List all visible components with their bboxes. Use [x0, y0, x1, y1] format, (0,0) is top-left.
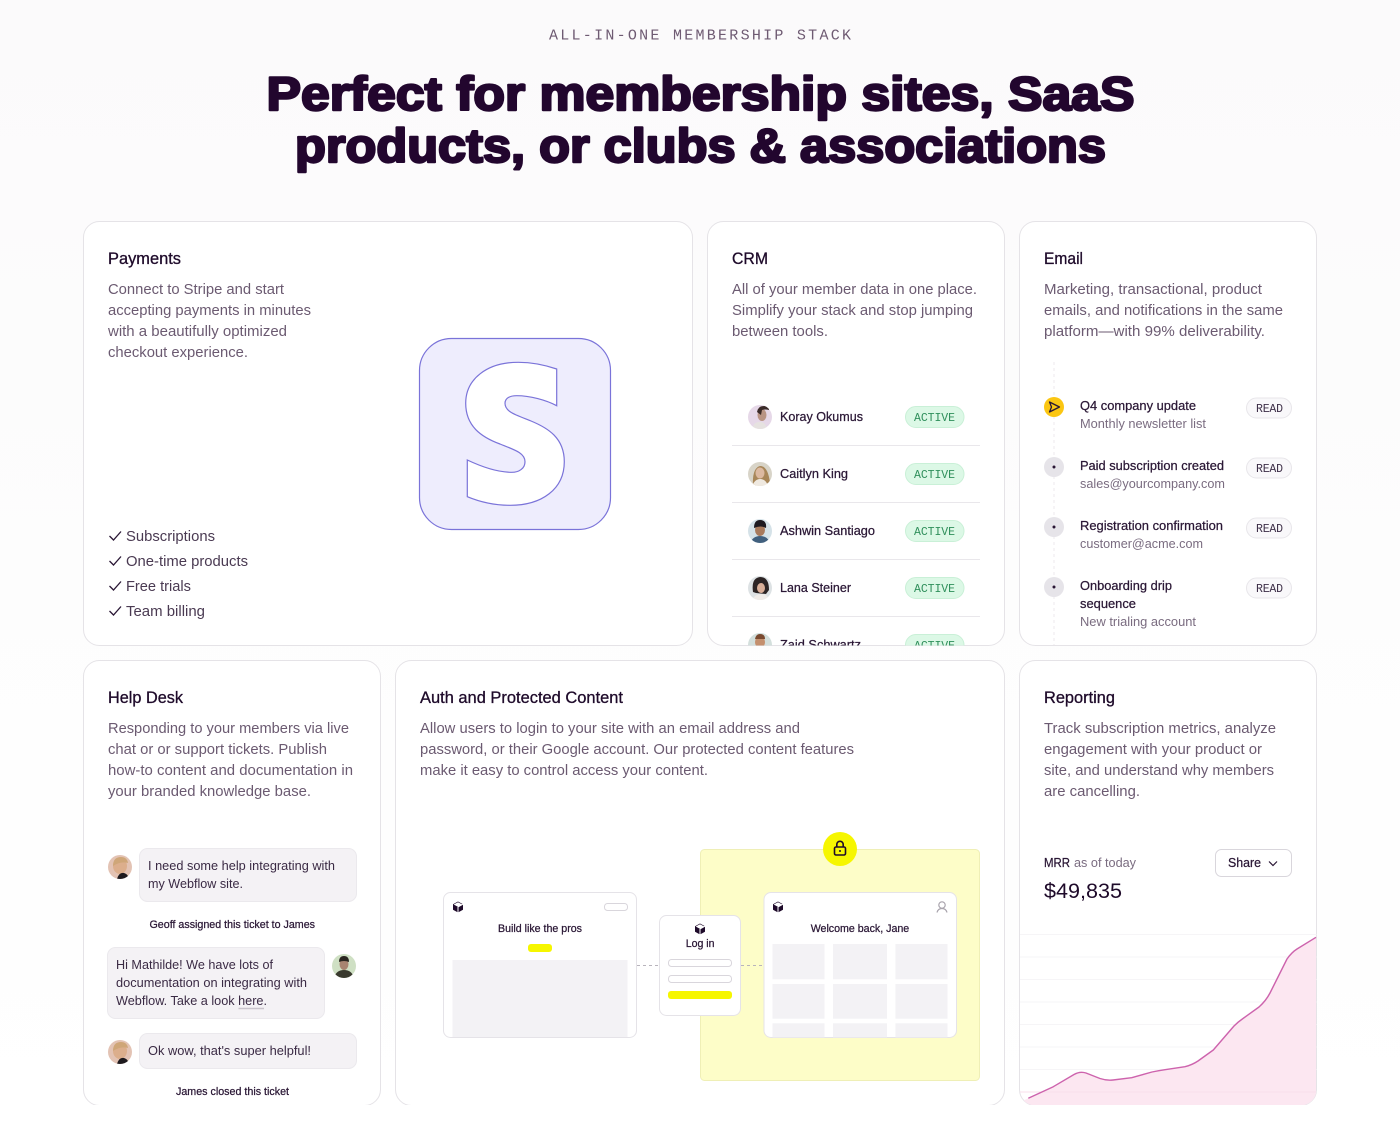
- crm description: Simplify your stack and stop jumping: [732, 302, 973, 319]
- email timeline: READ: [1256, 463, 1283, 476]
- mrr label: as of today: [1074, 856, 1137, 870]
- avatar: Mathilde: [108, 1040, 132, 1064]
- avatar: Koray: [748, 405, 772, 429]
- icon: user: [937, 902, 947, 912]
- auth description: make it easy to control access your content.: [420, 762, 708, 779]
- help desk description: Responding to your members via live: [108, 720, 349, 737]
- icon: send: [1044, 397, 1064, 417]
- email timeline: READ: [1256, 523, 1283, 536]
- login card: Log in: [686, 938, 714, 950]
- email timeline: New trialing account: [1080, 615, 1197, 629]
- reporting description: are cancelling.: [1044, 783, 1140, 800]
- feature checklist: One-time products: [126, 553, 248, 570]
- chat bubble: agent reply: Webflow. Take a look here.: [116, 993, 267, 1008]
- member list: ACTIVE: [914, 640, 955, 653]
- public page mockup: Build like the pros: [498, 923, 582, 935]
- panel: payments: [84, 222, 692, 646]
- help desk heading: Help Desk: [108, 689, 184, 707]
- payments heading: Payments: [108, 250, 181, 268]
- row: Caitlyn King: Caitlyn King: [780, 466, 848, 481]
- reporting description: engagement with your product or: [1044, 741, 1262, 758]
- email description: emails, and notifications in the same: [1044, 302, 1283, 319]
- chat bubble: customer question: my Webflow site.: [148, 876, 243, 891]
- row: Koray Okumus: Koray Okumus: [780, 409, 863, 424]
- reporting heading: Reporting: [1044, 689, 1115, 707]
- row: Lana Steiner: Lana Steiner: [780, 580, 852, 595]
- avatar: Zaid: [748, 633, 772, 646]
- payments description: checkout experience.: [108, 344, 248, 361]
- chat bubble: agent reply: Hi Mathilde! We have lots of: [116, 957, 273, 972]
- feature checklist: [110, 528, 248, 620]
- feature checklist: Team billing: [126, 603, 205, 620]
- email item: Registration confirmation: Registration confirmation: [1080, 518, 1223, 533]
- payments description: Connect to Stripe and start: [108, 281, 285, 298]
- payments description: [107, 281, 311, 361]
- email item: Onboarding drip sequence: Onboarding drip: [1080, 578, 1172, 593]
- payments description: with a beautifully optimized: [107, 323, 287, 340]
- member list: ACTIVE: [914, 526, 955, 539]
- email timeline: sequence: [1080, 596, 1136, 611]
- email timeline: [1044, 362, 1292, 645]
- member list: [732, 405, 980, 657]
- panel: auth and protected content: [396, 660, 1004, 1106]
- title: Perfect for membership sites, SaaS: [266, 67, 1134, 120]
- row: Ashwin Santiago: Ashwin Santiago: [780, 523, 875, 538]
- chat bubble: customer question: [140, 848, 356, 902]
- icon: dot: [1044, 517, 1064, 537]
- avatar: Caitlyn: [748, 462, 772, 486]
- panel: email: [1020, 222, 1316, 646]
- public page mockup: [444, 892, 636, 1038]
- login card: [660, 916, 740, 1016]
- connector: [637, 965, 762, 966]
- icon: dot: [1044, 577, 1064, 597]
- area chart: [1020, 934, 1317, 1110]
- auth description: Allow users to login to your site with an email address and: [420, 720, 800, 737]
- panel: reporting: [1020, 660, 1317, 1110]
- email timeline: READ: [1256, 583, 1283, 596]
- reporting description: [1044, 720, 1276, 800]
- auth description: [420, 720, 854, 779]
- chat bubble: customer thanks: [140, 1034, 356, 1068]
- crm heading: CRM: [732, 250, 768, 268]
- email item: Paid subscription created: Paid subscription created: [1080, 458, 1224, 473]
- chat bubble: customer thanks: Ok wow, that's super helpful!: [148, 1043, 311, 1058]
- member list: ACTIVE: [914, 412, 955, 425]
- payments description: accepting payments in minutes: [108, 302, 311, 319]
- email timeline: Monthly newsletter list: [1080, 417, 1207, 431]
- mrr label: [1044, 855, 1137, 870]
- email timeline: customer@acme.com: [1080, 537, 1203, 551]
- auth description: password, or their Google account. Our protected content features: [420, 741, 854, 758]
- status: ticket closed: James closed this ticket: [176, 1086, 289, 1098]
- icon: stripe logo: [420, 338, 610, 530]
- help desk description: how-to content and documentation in: [108, 762, 353, 779]
- avatar: Ashwin: [748, 519, 772, 543]
- icon: dot: [1044, 457, 1064, 477]
- member list: ACTIVE: [914, 469, 955, 482]
- protected area: [700, 850, 980, 1080]
- email description: Marketing, transactional, product: [1044, 281, 1263, 298]
- title: products, or clubs & associations: [295, 119, 1106, 172]
- member page mockup: Welcome back, Jane: [811, 923, 909, 935]
- reporting description: site, and understand why members: [1044, 762, 1274, 779]
- avatar: Lana: [748, 576, 772, 600]
- email heading: Email: [1044, 250, 1083, 268]
- row: Zaid Schwartz: Zaid Schwartz: [780, 637, 861, 652]
- email description: platform—with 99% deliverability.: [1044, 323, 1265, 340]
- email timeline: sales@yourcompany.com: [1080, 477, 1225, 491]
- auth heading: Auth and Protected Content: [420, 689, 623, 707]
- help desk description: chat or or support tickets. Publish: [108, 741, 327, 758]
- crm description: between tools.: [732, 323, 828, 340]
- member list: ACTIVE: [914, 583, 955, 596]
- icon: lock: [823, 832, 857, 866]
- crm description: All of your member data in one place.: [732, 281, 977, 298]
- chat bubble: agent reply: documentation on integrating with: [116, 975, 307, 990]
- title: [266, 67, 1134, 172]
- reporting description: Track subscription metrics, analyze: [1044, 720, 1276, 737]
- share button: [1216, 850, 1292, 876]
- eyebrow label: ALL-IN-ONE MEMBERSHIP STACK: [549, 28, 851, 44]
- mrr value: $49,835: [1044, 880, 1122, 903]
- avatar: James: [332, 954, 356, 978]
- avatar: Mathilde: [108, 855, 132, 879]
- email description: [1044, 281, 1283, 340]
- panel: crm: [708, 222, 1004, 657]
- email timeline: READ: [1256, 403, 1283, 416]
- help desk description: [108, 720, 353, 800]
- status: ticket assigned: Geoff assigned this ticket to James: [150, 919, 315, 931]
- email item: Q4 company update: Q4 company update: [1080, 398, 1196, 413]
- mrr label: MRR: [1044, 855, 1070, 870]
- help desk description: your branded knowledge base.: [108, 783, 311, 800]
- share button: Share: [1228, 855, 1261, 870]
- chat bubble: customer question: I need some help integrating with: [148, 858, 335, 873]
- crm description: [732, 281, 977, 340]
- feature checklist: Subscriptions: [126, 528, 215, 545]
- member page mockup: [764, 892, 956, 1038]
- feature checklist: Free trials: [126, 578, 191, 595]
- chat bubble: agent reply: [108, 948, 324, 1018]
- content grid: [772, 944, 948, 1037]
- panel: help desk: [84, 660, 380, 1106]
